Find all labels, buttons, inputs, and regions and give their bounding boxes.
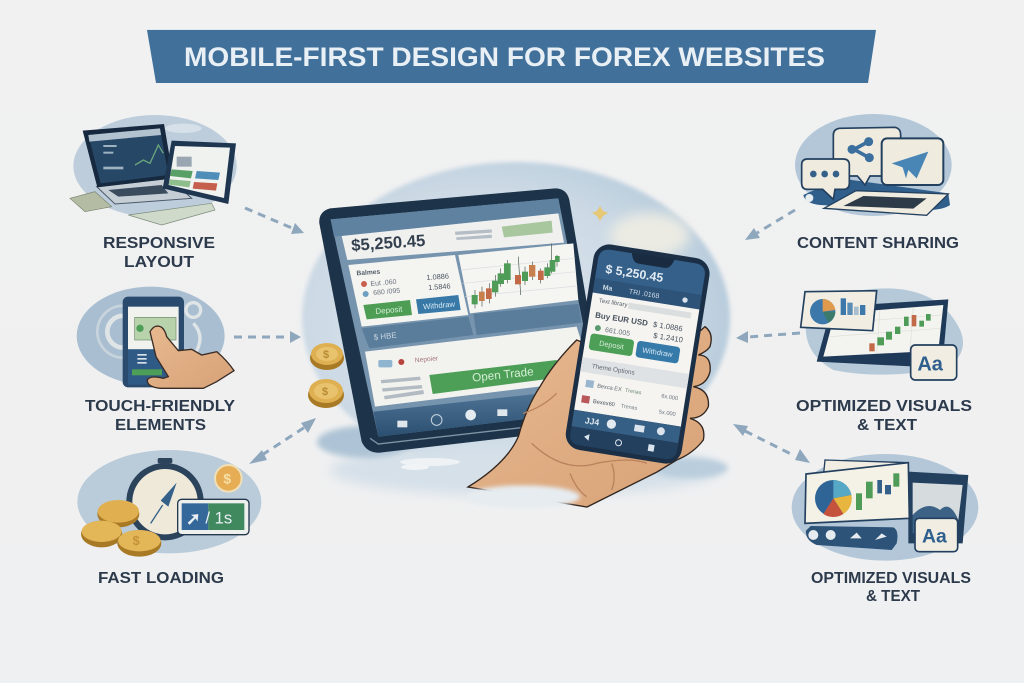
phone content panel: Bexex60 [592, 399, 615, 408]
coins beside tablet: $ [323, 349, 329, 361]
label: responsive layout [103, 235, 215, 271]
tab row: Ma [602, 284, 613, 293]
tablet body [319, 188, 605, 453]
arrow: content sharing to center [745, 210, 795, 240]
arrow: optimized visuals to center [736, 331, 800, 343]
sparkle [592, 206, 608, 221]
coins beside tablet [308, 343, 344, 408]
label: fast loading: FAST LOADING [98, 570, 224, 587]
open trade button [429, 360, 560, 394]
arrow: fast loading to center [249, 418, 316, 464]
phone content panel: Trenas [625, 388, 642, 396]
phone navigation: JJ4 [584, 415, 600, 427]
title banner [147, 29, 876, 83]
label: optimized visuals 2: & TEXT [866, 588, 920, 605]
arrow: touch-friendly to center [234, 331, 301, 343]
title: MOBILE-FIRST DESIGN FOR FOREX WEBSITES [184, 42, 825, 72]
central watercolor backdrop [302, 162, 730, 496]
phone content panel: Text library [598, 298, 628, 309]
balances panel [348, 255, 468, 327]
label: optimized visuals 1: & TEXT [857, 417, 917, 434]
tab row: TRI .0168 [628, 289, 660, 300]
icon: fast loading [77, 450, 261, 557]
chat bubble [802, 159, 849, 199]
balance amount: $5,250.45 [351, 231, 426, 255]
small coin [215, 465, 242, 492]
gold coins: $ [133, 534, 140, 548]
phone content panel: Bexca EX [597, 383, 622, 393]
phone content panel: $ 1.0886 [652, 320, 683, 333]
keyboard [824, 191, 948, 215]
icon: content sharing [795, 114, 952, 216]
info strips: $ HBE [373, 331, 397, 342]
arrow: responsive layout to center [245, 208, 304, 234]
stopwatch [126, 458, 204, 540]
label: optimized visuals 1: OPTIMIZED VISUALS [796, 398, 972, 415]
label: responsive layout: RESPONSIVE [103, 235, 215, 252]
icon: responsive layout [70, 115, 237, 225]
phone content panel: Deposit [599, 339, 624, 351]
lower order panel [365, 327, 593, 407]
speed badge [178, 499, 249, 535]
info strips [362, 304, 582, 348]
icon: optimized visuals 1 [801, 288, 963, 380]
control toolbar [806, 526, 897, 550]
speed badge: / 1s [205, 508, 232, 527]
phone withdraw button [635, 341, 681, 364]
notch [630, 252, 675, 269]
tablet [319, 188, 605, 453]
hand holding phone [467, 327, 711, 508]
balances panel: Withdraw [423, 300, 456, 311]
balances panel: Deposit [375, 305, 404, 316]
phone balance: $ 5,250.45 [604, 262, 664, 285]
phone content panel: Buy EUR USD [595, 311, 649, 328]
phone header [593, 248, 706, 309]
withdraw button [416, 295, 461, 314]
smartphone [563, 242, 712, 466]
pointing hand [147, 326, 234, 388]
device base [803, 178, 950, 210]
pie and bars card [801, 291, 877, 331]
label: touch-friendly elements [85, 398, 235, 434]
coins beside tablet: $ [322, 386, 328, 398]
small coin: $ [223, 470, 231, 486]
phone content panel: Withdraw [642, 345, 674, 359]
phone content panel: Trenas [620, 403, 638, 412]
icon: optimized visuals 2 [792, 454, 978, 561]
tab row [593, 278, 702, 309]
dark side screen [908, 472, 968, 543]
tablet navigation bar [373, 387, 600, 437]
map paper and bills [70, 192, 215, 225]
balance card [342, 213, 564, 260]
lower order panel: Open Trade [472, 365, 534, 385]
label: optimized visuals 2: OPTIMIZED VISUALS [811, 570, 971, 587]
balances panel: 680 /095 [373, 288, 401, 297]
arrow: optimized visuals 2 to center [733, 424, 810, 463]
candlestick chart [458, 243, 578, 313]
palm creases [523, 393, 647, 497]
paper plane window [882, 138, 943, 185]
target rings [97, 303, 201, 358]
phone [123, 297, 184, 387]
back page [823, 460, 908, 483]
label: touch-friendly elements: ELEMENTS [115, 417, 206, 434]
phone content panel [574, 293, 699, 427]
deposit button [363, 300, 412, 319]
label: touch-friendly elements: TOUCH-FRIENDLY [85, 398, 235, 415]
balances panel: 1.5846 [428, 281, 451, 292]
phone content panel: 661.005 [604, 327, 631, 338]
label: optimized visuals 2 [811, 570, 971, 605]
laptop [83, 124, 192, 204]
tablet screen [331, 198, 600, 437]
icon: touch-friendly elements [77, 287, 234, 388]
Aa card: Aa [922, 527, 947, 548]
lower order panel: Nepoier [415, 355, 439, 364]
label: responsive layout: LAYOUT [124, 254, 194, 271]
gold coins [81, 500, 161, 557]
Aa card [911, 345, 957, 380]
large share bubble [833, 127, 901, 185]
phone navigation [572, 410, 681, 443]
phone content panel: Theme Options [591, 363, 635, 377]
balances panel: Balmes [356, 269, 381, 277]
phone system bar [569, 426, 678, 461]
balances panel: 1.0886 [426, 271, 449, 282]
phone content panel: 6x.000 [661, 394, 679, 402]
phone body [563, 242, 712, 466]
Aa card [915, 518, 958, 552]
pie and candlestick card [805, 463, 909, 523]
phone content panel: $ 1.2410 [653, 331, 684, 345]
small tablet [163, 141, 236, 204]
phone content panel: 5x.000 [658, 409, 676, 418]
wrist fade [467, 485, 580, 508]
Aa card: Aa [917, 354, 944, 376]
label: optimized visuals 1 [796, 398, 972, 434]
speed badge: ➚ [186, 508, 201, 528]
balances panel: Eut .060 [370, 279, 397, 288]
phone deposit button [588, 333, 634, 356]
chart tablet [817, 299, 948, 367]
label: content sharing: CONTENT SHARING [797, 235, 959, 252]
